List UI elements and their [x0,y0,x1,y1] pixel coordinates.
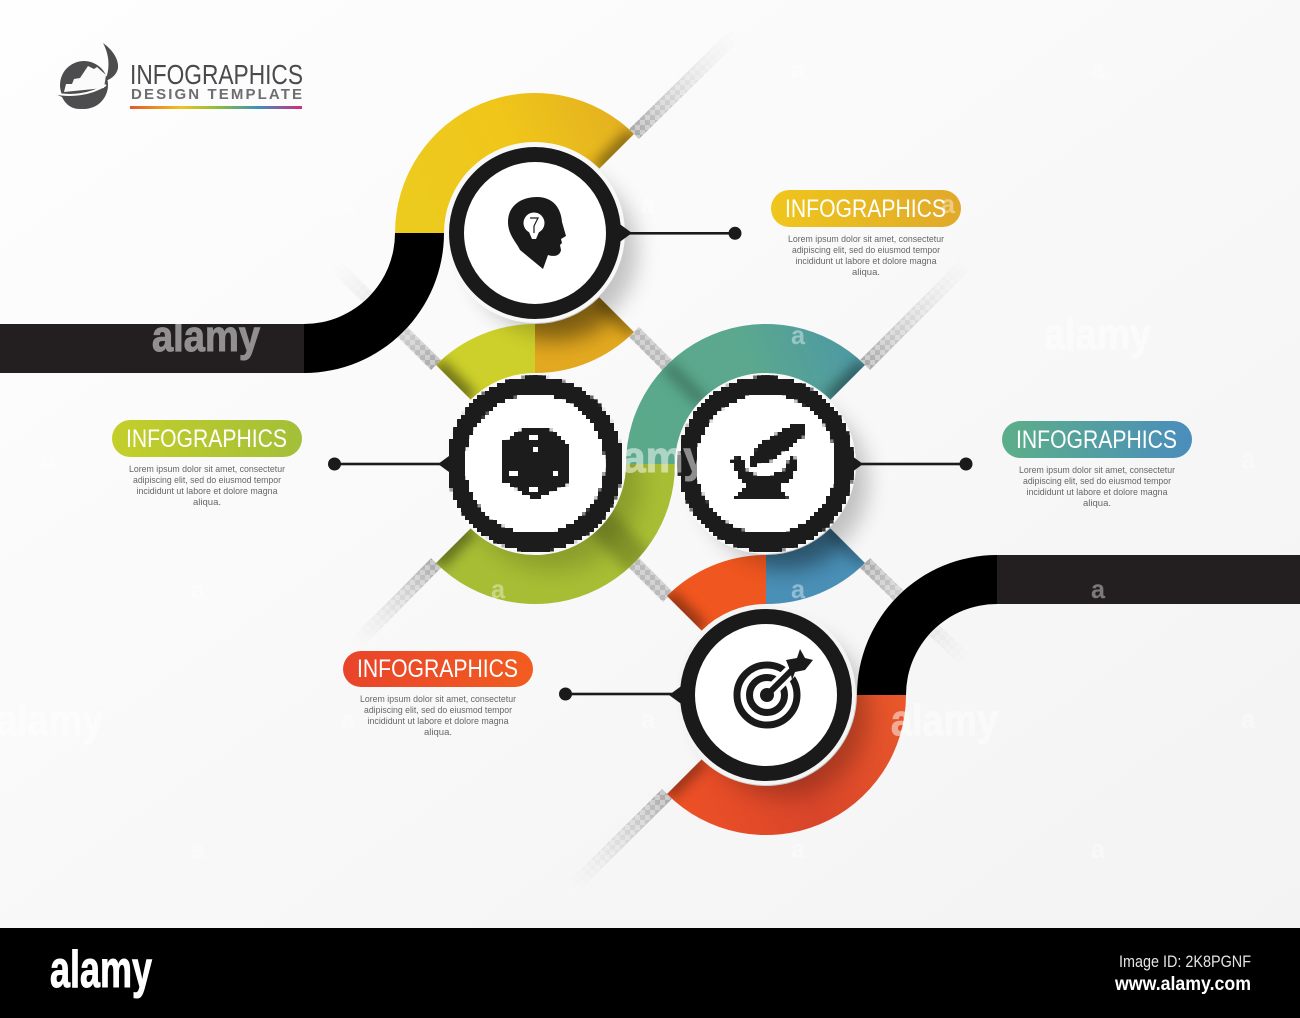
right black exit road [857,555,1300,695]
watermarks: a [641,189,656,219]
watermarks: a [341,704,356,734]
description: aliqua. [1083,498,1111,509]
text block: step 3 [1002,421,1192,509]
watermarks: a [791,320,806,350]
logo subtitle: DESIGN TEMPLATE [131,86,302,103]
watermarks [0,54,1256,864]
description: Lorem ipsum dolor sit amet, consectetur [129,464,285,475]
step 2 and 3 pixelated nodes [328,374,972,554]
watermarks: a [1241,444,1256,474]
image id: Image ID: 2K8PGNF [1119,952,1251,971]
halo [445,143,625,323]
text block: step 2 [112,420,302,508]
watermarks: a [191,834,206,864]
label pill [112,420,302,457]
step 4 node [559,605,856,785]
step 1 node [445,143,742,323]
description: incididunt ut labore et dolore magna [1026,487,1168,498]
logo mark [53,43,118,109]
description: adipiscing elit, sed do eiusmod tempor [133,475,281,486]
description: aliqua. [193,497,221,508]
watermarks: a [791,54,806,84]
watermarks: a [641,704,656,734]
text block: step 1 [771,190,961,278]
description: incididunt ut labore et dolore magna [796,256,937,267]
description: adipiscing elit, sed do eiusmod tempor [364,705,512,716]
description: incididunt ut labore et dolore magna [136,486,278,497]
label pill [343,651,533,687]
watermarks: alamy [152,312,260,361]
description: Lorem ipsum dolor sit amet, consectetur [1019,465,1175,476]
label: INFOGRAPHICS [785,195,946,223]
description [129,464,285,508]
connector: right [841,448,972,480]
description: aliqua. [852,267,880,278]
connector [610,217,742,249]
arc: teal [626,324,865,464]
watermarks: a [941,189,956,219]
watermarks: a [791,574,806,604]
watermarks: a [791,834,806,864]
arc: yellow [395,93,634,233]
arc: blue [766,528,865,604]
label pill [771,190,961,227]
arc: green [436,464,675,604]
arc: red [667,695,906,835]
ring [456,154,614,312]
watermarks: a [41,444,56,474]
watermarks: a [1091,834,1106,864]
halo: left [445,374,625,554]
description: adipiscing elit, sed do eiusmod tempor [792,245,940,256]
description: Lorem ipsum dolor sit amet, consectetur [360,694,516,705]
description [360,694,516,738]
footer bar [0,928,1300,1018]
watermarks: a [341,189,356,219]
description: incididunt ut labore et dolore magna [368,716,509,727]
watermarks: alamy [1044,310,1151,359]
watermarks: a [491,574,506,604]
description [1019,465,1175,509]
icon: head with lightbulb [508,197,566,269]
arc: amber [535,297,634,373]
halo: right [676,374,856,554]
arc: orange [667,555,766,631]
label: INFOGRAPHICS [357,655,518,683]
watermarks: alamy [891,696,998,745]
watermarks: a [1241,704,1256,734]
connector: left [328,448,460,480]
ring: left [457,386,613,542]
watermarks: a [1091,574,1106,604]
website: www.alamy.com [1114,974,1251,995]
connector [559,679,691,711]
logo title: INFOGRAPHICS [130,59,303,90]
label: INFOGRAPHICS [1016,426,1177,454]
pixelated circles and icons [457,386,844,542]
rainbow underline [130,106,302,109]
watermarks: a [1091,54,1106,84]
halo [676,605,856,785]
footer logo: alamy [50,941,152,999]
ring [688,616,844,774]
label pill [1002,421,1192,458]
icon: telescope [729,424,806,500]
description: Lorem ipsum dolor sit amet, consectetur [788,234,944,245]
label: INFOGRAPHICS [126,425,287,453]
icon: textured blob [500,428,571,501]
icon: target with arrow [737,649,813,725]
description: adipiscing elit, sed do eiusmod tempor [1023,476,1171,487]
ring: right [688,386,844,542]
description [788,234,944,278]
watermarks: a [191,574,206,604]
diagonal fold stripes [335,35,970,890]
watermarks: amy [622,433,707,482]
arc: lime [436,324,535,400]
circle shadows [469,167,868,797]
description: aliqua. [424,727,452,738]
left black entry road [0,233,444,373]
text block: step 4 [343,651,533,738]
logo [53,43,303,109]
